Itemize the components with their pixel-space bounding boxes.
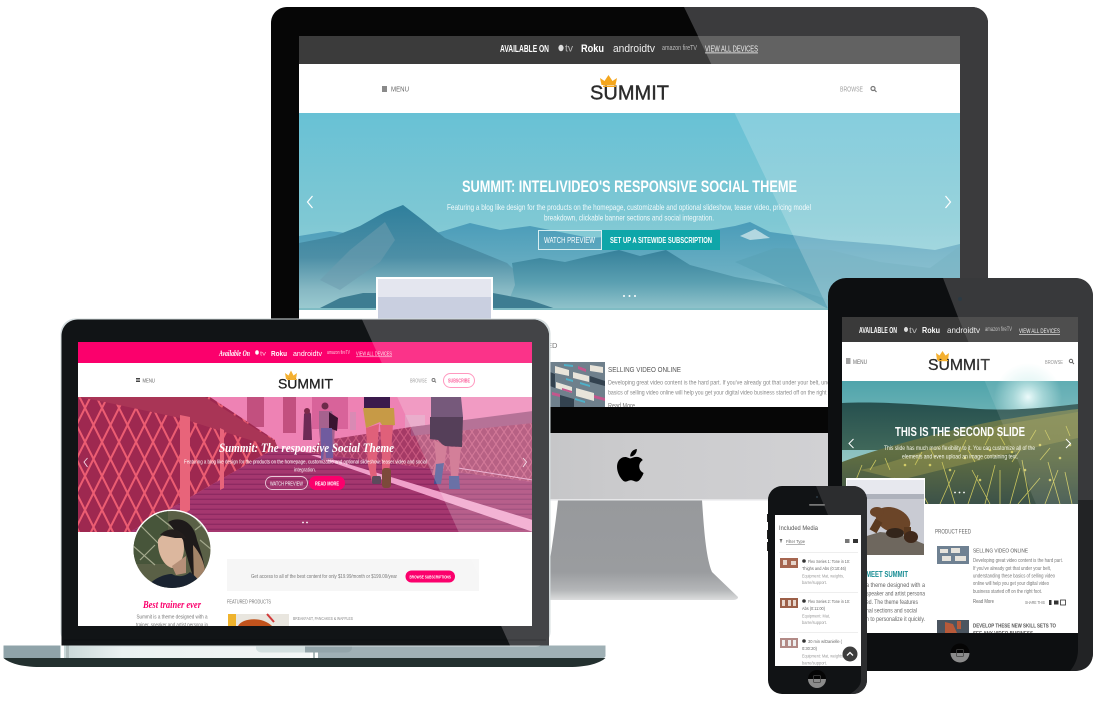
- hero: meadow landscape: [842, 363, 1078, 504]
- trainer bio: trainer, speaker and artist persona in: [136, 622, 208, 628]
- product feed: SHARE THIS: [1025, 600, 1045, 605]
- logo: Summit: [590, 75, 669, 100]
- site header: BROWSE: [410, 378, 428, 384]
- hero heading: Summit: The responsive Social Theme: [219, 440, 394, 455]
- product feed: If you've already got that under your belt,: [973, 566, 1051, 572]
- thumbnail: [937, 546, 969, 564]
- availability bar: amazon fireTV: [327, 350, 350, 356]
- tablet right edge: [1070, 500, 1093, 671]
- button: subscribe: [444, 374, 474, 388]
- home button: [808, 670, 826, 688]
- trainer bio: Summit is a theme designed with a: [136, 614, 208, 620]
- left fence: [78, 397, 275, 532]
- button: watch preview: [266, 476, 308, 490]
- media item 2: [779, 598, 858, 633]
- profile card: [376, 277, 493, 321]
- front camera: [958, 297, 962, 301]
- thumbnail: [550, 362, 605, 407]
- product feed: understanding these basics of selling video: [973, 574, 1055, 580]
- product feed: SEE ANY VIDEO BUSINESS: [973, 631, 1033, 637]
- logo: Summit: [928, 351, 990, 370]
- trainer bio: [136, 600, 208, 628]
- about text: speaker and artist persona: [866, 592, 926, 598]
- hero description: [448, 204, 811, 222]
- hero description: elements and even upload an image containing text.: [902, 454, 1018, 460]
- bear: [870, 507, 918, 543]
- site header: MENU: [853, 360, 867, 366]
- filter row: [779, 539, 858, 553]
- hero description: [884, 445, 1035, 460]
- about text: MEET SUMMIT: [866, 570, 908, 579]
- button: watch preview: [538, 230, 602, 250]
- subscription banner: Get access to all of the best content for only $19.99/month or $199.00/year: [251, 574, 397, 580]
- media item 1: Flex Series 1: Tone in 10:: [808, 559, 850, 564]
- hero heading: THIS IS THE SECOND SLIDE: [895, 424, 1025, 439]
- site header: BROWSE: [1045, 360, 1063, 366]
- product feed: basics of selling video online will help you get your digital video business started off on the right foot.: [608, 390, 838, 396]
- slider dots: [623, 295, 636, 297]
- featured products: BREAKFAST, PANCAKES & WAFFLES: [293, 616, 353, 621]
- slider arrows: [84, 458, 526, 467]
- iMac stand: [550, 500, 738, 600]
- media item 2: Abs (0:11:00): [802, 606, 826, 611]
- availability bar: VIEW ALL DEVICES: [1019, 328, 1060, 335]
- speaker and camera: [809, 496, 825, 506]
- product feed: Read More: [608, 403, 635, 410]
- menu: MENU: [391, 84, 409, 94]
- featured products: [227, 600, 353, 626]
- phone screen: [775, 515, 861, 666]
- about text: [866, 570, 926, 623]
- media item 3: 0:30:20): [802, 646, 818, 651]
- button: subscribe: SUBSCRIBE: [448, 378, 470, 384]
- site header: [382, 75, 877, 100]
- hero description: Featuring a blog like design for the products on the homepage, customizable and optional slideshow, teaser video and social: [184, 460, 427, 466]
- thumbnail: [228, 614, 289, 626]
- about text: nal sections and social: [866, 608, 917, 614]
- towers: [247, 397, 425, 433]
- Apple logo: [617, 449, 644, 482]
- media item 3: 30 min w/Danielle (: [808, 639, 843, 644]
- device: phone: [767, 486, 867, 694]
- slider dots: [954, 492, 965, 493]
- right fence: [311, 413, 533, 482]
- screen glare: [698, 36, 960, 308]
- slider arrows: [849, 439, 1070, 448]
- availability bar: amazon fireTV: [662, 45, 697, 52]
- media item 2: Equipment: Mat,: [802, 614, 830, 618]
- tablet screen glare: [958, 317, 1078, 562]
- hero heading: SUMMIT: INTELIVIDEO'S RESPONSIVE SOCIAL THEME: [462, 177, 797, 196]
- availability bar: Roku: [271, 351, 287, 358]
- availability bar: androidtv: [947, 325, 981, 335]
- button: subscription: SET UP A SITEWIDE SUBSCRIPTION: [610, 236, 712, 245]
- subscription banner: [227, 559, 479, 591]
- browse and search: BROWSE: [840, 86, 863, 94]
- hero: runners on bridge: [78, 397, 533, 532]
- bear photo card: [846, 478, 925, 556]
- laptop screen glare: [362, 320, 549, 645]
- product feed: online will help you get your digital video: [973, 581, 1049, 587]
- site header: [136, 370, 475, 389]
- availability bar: tv: [565, 44, 573, 54]
- availability bar: androidtv: [613, 43, 655, 55]
- product feed: DEVELOP THESE NEW SKILL SETS TO: [973, 624, 1057, 630]
- button: read more: READ MORE: [315, 482, 340, 488]
- button: watch preview: WATCH PREVIEW: [544, 236, 595, 245]
- availability bar: Available On: [218, 348, 250, 358]
- hero description: [184, 460, 427, 474]
- product feed: ED: [547, 341, 558, 350]
- availability bar: [299, 36, 960, 64]
- logo: Summit: SUMMIT: [278, 376, 333, 392]
- media item 3: Equipment: Mat, weights,: [802, 654, 844, 658]
- iMac bezel: [271, 7, 988, 433]
- share icons: [1049, 600, 1066, 605]
- about text: ed. The theme features: [866, 600, 918, 606]
- about text: n to personalize it quickly.: [866, 617, 925, 623]
- hero description: This slide has much more flexibility to it. You can customize all of the: [884, 445, 1035, 452]
- hero description: integration.: [294, 468, 316, 474]
- media item 1: Thighs and Abs (0:10:46): [802, 566, 847, 571]
- bezel glare: [684, 7, 988, 407]
- logo: Summit: SUMMIT: [590, 82, 669, 104]
- scroll-to-top button: [842, 646, 858, 662]
- availability bar: tv: [260, 350, 267, 358]
- availability bar: Roku: [922, 326, 940, 335]
- availability bar: tv: [909, 326, 917, 335]
- trainer bio: Best trainer ever: [142, 600, 202, 611]
- included media heading: Included Media: [779, 525, 818, 532]
- media item 3: [780, 638, 844, 666]
- about text: a theme designed with a: [866, 583, 926, 589]
- menu: [382, 86, 409, 92]
- home button: [950, 644, 970, 662]
- avatar: trainer portrait: [132, 509, 212, 592]
- slider arrows: [308, 196, 950, 208]
- availability bar: [78, 342, 532, 363]
- product feed: Developing great video content is the hard part. If you've already got that under your belt, understanding these: [608, 380, 870, 386]
- laptop lid: [60, 318, 550, 646]
- media item 2: barre/support.: [802, 620, 827, 625]
- product feed: SELLING VIDEO ONLINE: [973, 548, 1028, 554]
- filter row: Filter Type: [786, 539, 805, 545]
- button: read more: [309, 476, 345, 490]
- hero description: breakdown, clickable banner sections and social integration.: [544, 212, 714, 222]
- availability bar: [842, 317, 1078, 342]
- runner front one: [363, 397, 395, 488]
- deck: [130, 448, 533, 532]
- phone body: [767, 486, 867, 694]
- hero description: Featuring a blog like design for the products on the homepage, customizable and optional slideshow, teaser video, pricing model: [447, 202, 811, 212]
- availability bar: amazon fireTV: [985, 327, 1012, 333]
- logo: Summit: SUMMIT: [928, 357, 991, 374]
- subscription banner: BROWSE SUBSCRIPTIONS: [410, 574, 451, 580]
- far deck line: [458, 468, 533, 480]
- availability bar: AVAILABLE ON: [859, 326, 897, 335]
- slider dots: [302, 522, 308, 523]
- thumbnail 2: [937, 620, 969, 633]
- availability bar: Roku: [581, 43, 604, 55]
- availability bar: androidtv: [293, 351, 323, 358]
- product feed: SELLING VIDEO ONLINE: [608, 365, 681, 374]
- iMac chin: [271, 433, 988, 500]
- product feed: [935, 530, 1066, 637]
- site header: [846, 351, 1074, 370]
- device: tablet: [828, 278, 1093, 671]
- availability bar: VIEW ALL DEVICES: [356, 352, 392, 358]
- tablet body: [828, 278, 1093, 671]
- media item 1: Equipment: Mat, weights,: [802, 574, 844, 578]
- device: iMac desktop: [271, 7, 988, 600]
- stripe: [311, 455, 533, 532]
- iMac screen: [299, 36, 960, 407]
- product feed: PRODUCT FEED: [935, 530, 972, 536]
- hero: mountains: [299, 113, 960, 310]
- button: watch preview: WATCH PREVIEW: [270, 482, 303, 488]
- product feed: Developing great video content is the hard part.: [973, 558, 1063, 564]
- site header: MENU: [142, 378, 155, 384]
- featured products: FEATURED PRODUCTS: [227, 600, 271, 606]
- media item 1: barre/support.: [802, 580, 827, 585]
- availability bar: AVAILABLE ON: [500, 44, 549, 55]
- media item 3: barre/support.: [802, 660, 827, 666]
- button: subscription: [602, 230, 720, 250]
- media item 2: Flex Series 2: Tone in 10:: [808, 599, 850, 604]
- tablet glare on bezel: [943, 278, 1093, 500]
- runner front two: [430, 397, 463, 489]
- runner far couple: [303, 402, 338, 460]
- tablet screen: [842, 317, 1078, 637]
- product feed: [550, 343, 828, 407]
- laptop base: [4, 646, 606, 667]
- product feed: Read More: [973, 599, 994, 605]
- laptop screen: [78, 342, 532, 626]
- availability bar: VIEW ALL DEVICES: [705, 44, 758, 54]
- product feed: business started off on the right foot.: [973, 589, 1042, 595]
- device: laptop: [4, 318, 606, 667]
- media item 1: [779, 558, 858, 593]
